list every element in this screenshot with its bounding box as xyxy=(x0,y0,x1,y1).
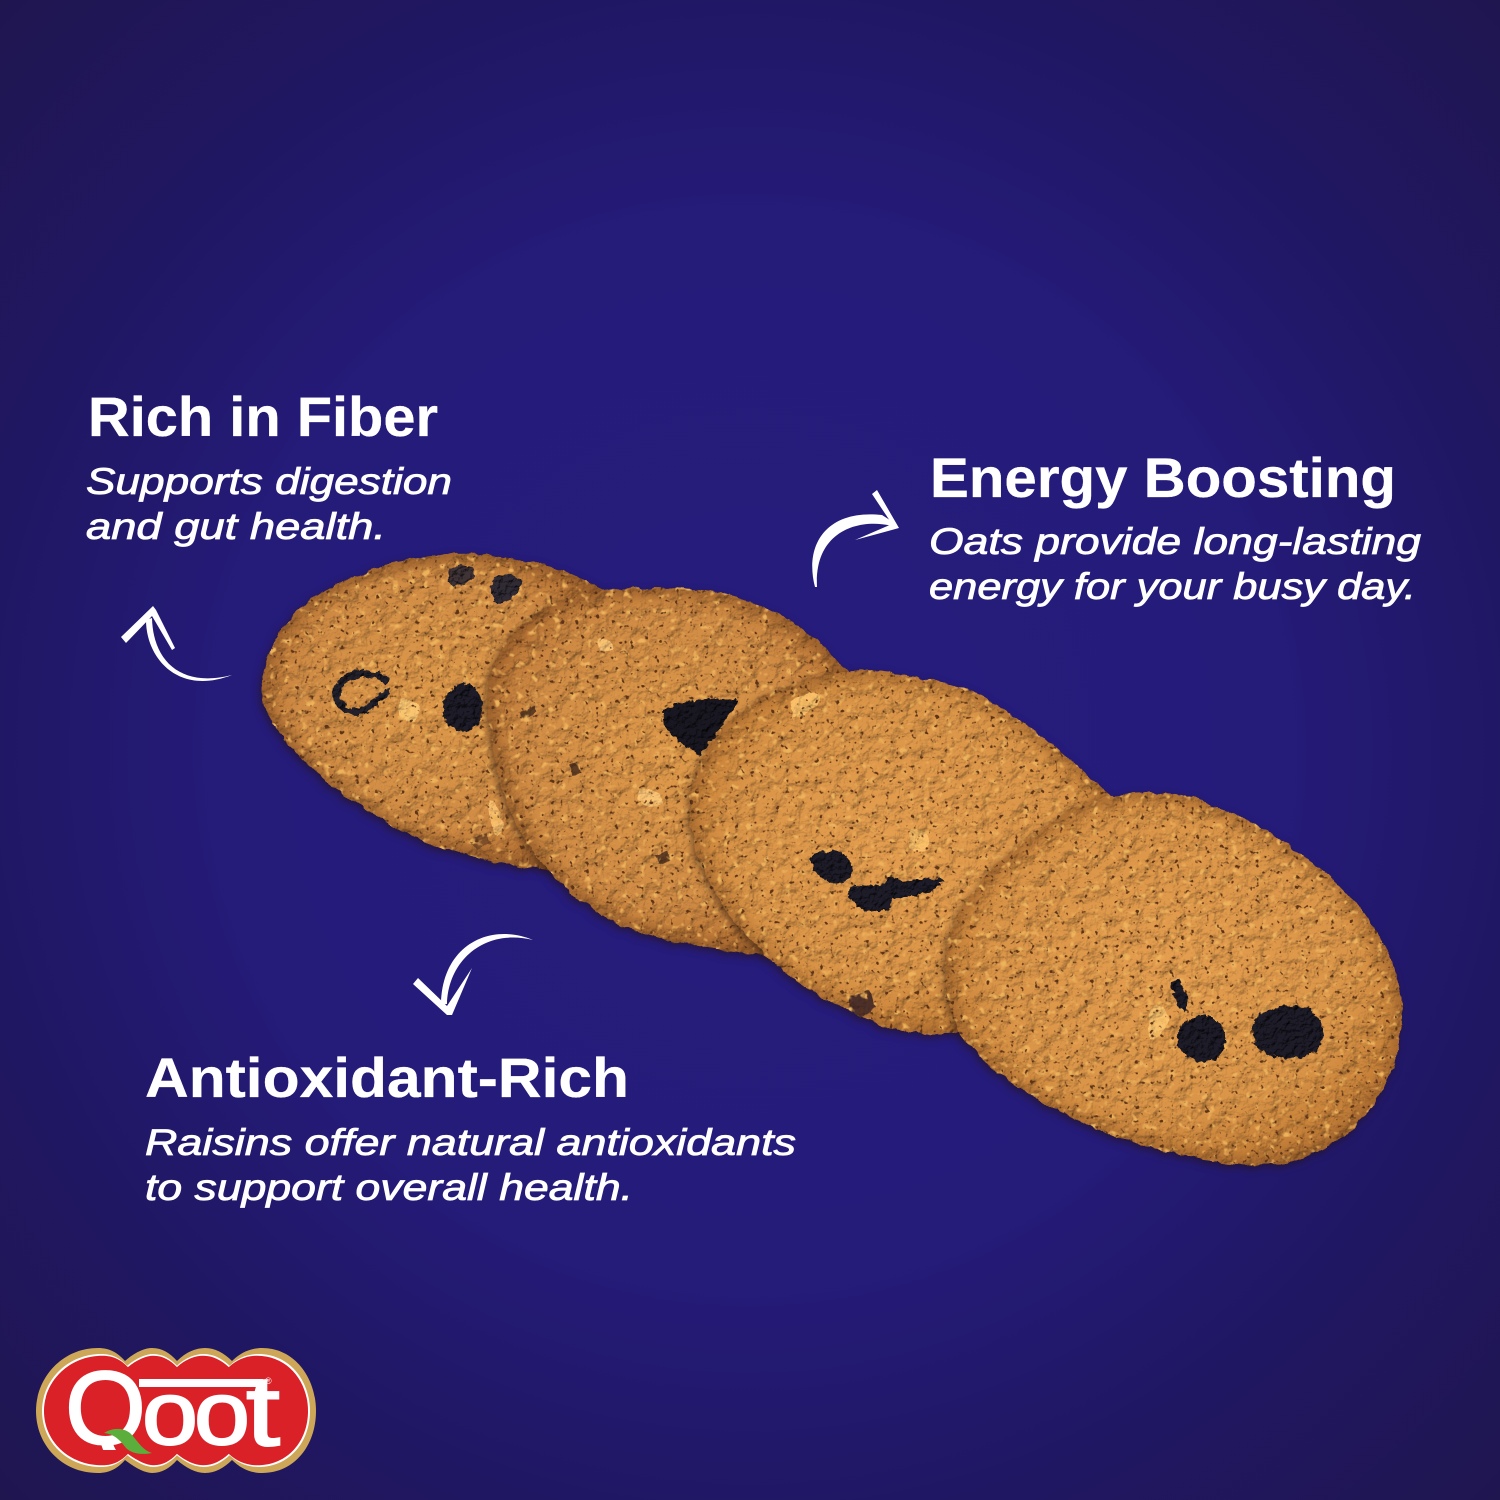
logo: Qoot xyxy=(36,1348,316,1473)
logo: Qoot: o xyxy=(142,1364,198,1464)
cookie 1 xyxy=(262,554,608,872)
heading: Antioxidant-Rich: Antioxidant-Rich xyxy=(145,1046,629,1109)
text: Energy Boosting description: energy for your busy day. xyxy=(929,566,1416,607)
text: Antioxidant-Rich description: to support overall health. xyxy=(145,1167,633,1208)
arrow: to Rich in Fiber xyxy=(121,606,232,681)
text: Energy Boosting description: Oats provide long-lasting xyxy=(929,521,1422,562)
logo: Qoot: Q xyxy=(65,1351,146,1467)
arrow: to Energy Boosting xyxy=(812,490,899,587)
cookie 2 xyxy=(488,588,848,955)
cookie 3 xyxy=(690,670,1110,1034)
text: Antioxidant-Rich description: Raisins offer natural antioxidants xyxy=(145,1122,796,1163)
text: Energy Boosting description xyxy=(929,521,1422,607)
text: Antioxidant-Rich description xyxy=(145,1122,796,1208)
text: Rich in Fiber description xyxy=(86,461,452,547)
logo: Qoot: t xyxy=(246,1355,280,1467)
logo: Qoot: ® xyxy=(265,1376,272,1386)
logo: Qoot: o xyxy=(194,1364,250,1464)
heading: Energy Boosting: Energy Boosting xyxy=(930,446,1396,509)
arrow: to Antioxidant-Rich xyxy=(413,934,533,1015)
text: Rich in Fiber description: and gut health. xyxy=(86,506,386,547)
text: Rich in Fiber description: Supports digestion xyxy=(86,461,452,502)
heading: Rich in Fiber: Rich in Fiber xyxy=(88,385,438,448)
cookies group xyxy=(262,554,1402,1165)
cookie 4 xyxy=(945,792,1402,1165)
